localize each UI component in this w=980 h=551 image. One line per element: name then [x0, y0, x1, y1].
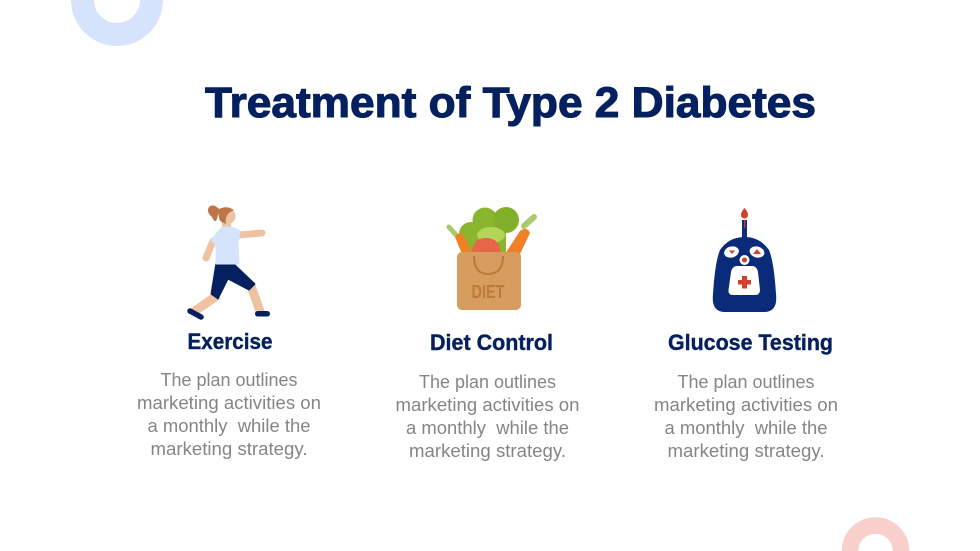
text block: exercise: The plan outlines: [160, 370, 298, 390]
text block: diet control: The plan outlines: [419, 372, 556, 392]
text block: diet control: marketing strategy.: [409, 441, 566, 461]
heading: glucose testing: Glucose Testing: [668, 330, 833, 355]
text block: glucose testing: marketing activities on: [654, 395, 838, 415]
panel: diet control: [396, 207, 580, 461]
text block: glucose testing: marketing strategy.: [668, 441, 824, 461]
panel: exercise: [137, 205, 321, 459]
text block: diet control: [396, 372, 580, 461]
heading: diet control: Diet Control: [430, 330, 553, 355]
text block: glucose testing: The plan outlines: [678, 372, 814, 392]
text block: exercise: [137, 370, 321, 459]
title: Treatment of Type 2 Diabetes: [205, 79, 816, 127]
panel: glucose testing: [654, 208, 838, 461]
text block: glucose testing: [654, 372, 838, 461]
text block: exercise: a monthly while the: [148, 416, 310, 436]
text block: exercise: marketing activities on: [137, 393, 321, 413]
text block: glucose testing: a monthly while the: [664, 418, 828, 438]
heading: exercise: Exercise: [188, 329, 272, 354]
text block: diet control: a monthly while the: [406, 418, 569, 438]
icon: running woman: [190, 205, 270, 317]
icon: grocery bag with vegetables: DIET: [472, 282, 504, 302]
decorative ring: pink bottom right: [850, 526, 901, 551]
icon: grocery bag with vegetables: [449, 207, 534, 310]
text block: diet control: marketing activities on: [396, 395, 580, 415]
text block: exercise: marketing strategy.: [150, 439, 308, 459]
icon: glucose meter: [713, 208, 776, 312]
decorative ring: blue top left: [82, 0, 152, 34]
